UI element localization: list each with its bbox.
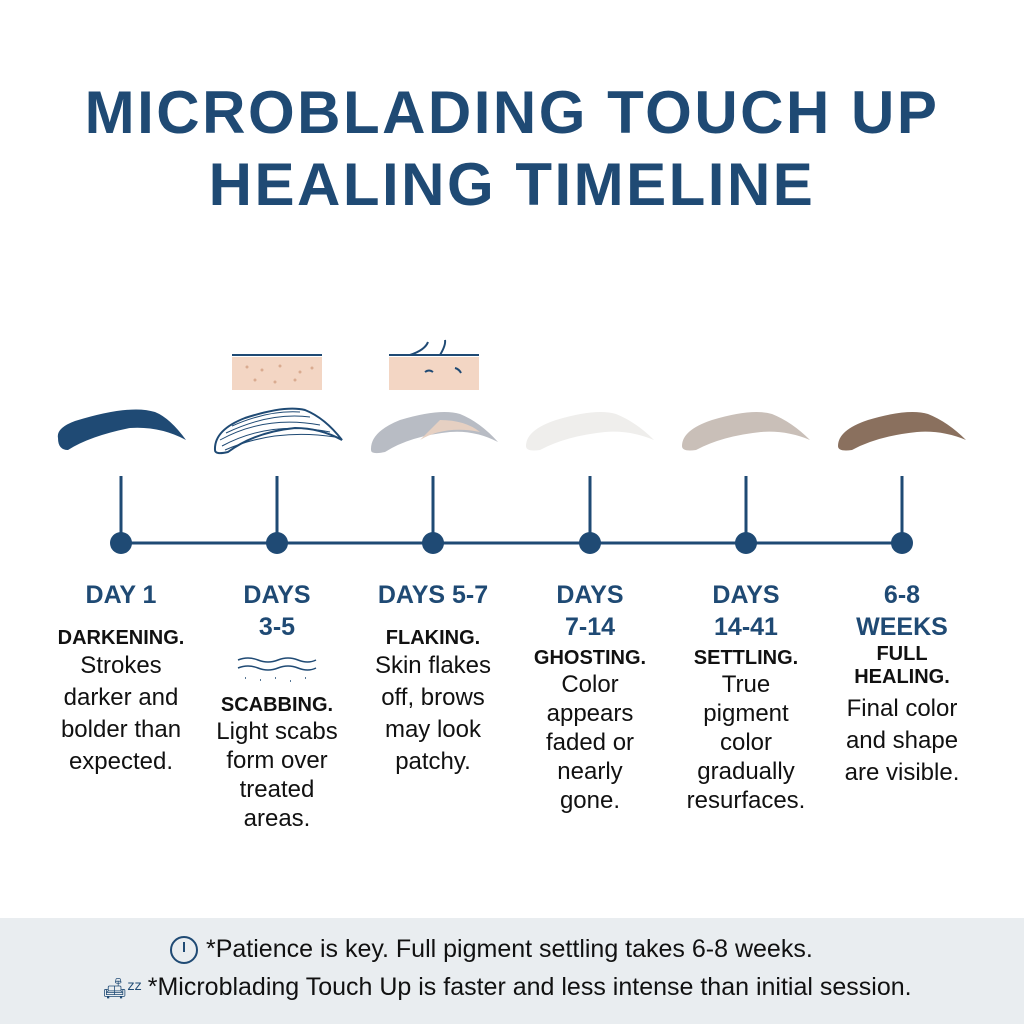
- column: 6-8 weeks: HEALING.: [854, 666, 950, 688]
- column: days 14-41: [687, 581, 805, 814]
- column: day 1: expected.: [69, 748, 173, 775]
- column: days 5-7: Skin flakes: [375, 652, 491, 679]
- column: 6-8 weeks: 6-8: [884, 581, 920, 609]
- icon: healed brow: [838, 412, 966, 450]
- column: days 5-7: FLAKING.: [386, 627, 480, 649]
- title: HEALING TIMELINE: [209, 151, 815, 218]
- column: days 3-5: areas.: [244, 805, 310, 832]
- column: 6-8 weeks: are visible.: [845, 759, 959, 786]
- footer panel: [0, 918, 1024, 1024]
- column: days 3-5: treated: [240, 776, 314, 803]
- icon: skin patch flaking: [389, 340, 479, 390]
- icon: ghost brow: [526, 412, 654, 450]
- title: MICROBLADING TOUCH UP: [85, 79, 939, 146]
- column: day 1: bolder than: [61, 716, 181, 743]
- column: days 3-5: form over: [226, 747, 328, 774]
- footer note 1: *Patience is key. Full pigment settling takes 6-8 weeks.: [206, 935, 813, 963]
- column: days 5-7: may look: [385, 716, 481, 743]
- column: 6-8 weeks: FULL: [876, 643, 928, 665]
- column: days 7-14: DAYS: [556, 581, 624, 609]
- column: days 14-41: color: [720, 729, 772, 756]
- column: day 1: Strokes: [80, 652, 162, 679]
- column: 6-8 weeks: WEEKS: [856, 613, 948, 641]
- icon: flaking brow: [371, 412, 498, 453]
- column: days 7-14: appears: [547, 700, 633, 727]
- column: days 14-41: gradually: [697, 758, 795, 785]
- footer note 2: 🛋ᶻᶻ*Microblading Touch Up is faster and less intense than initial session.: [102, 973, 912, 1001]
- icon: outlined brow: [215, 409, 342, 453]
- column: days 3-5: [216, 581, 338, 832]
- column: days 14-41: pigment: [703, 700, 789, 727]
- column: days 14-41: 14-41: [714, 613, 778, 641]
- column: days 14-41: resurfaces.: [687, 787, 805, 814]
- column: days 3-5: 3-5: [259, 613, 295, 641]
- icon: skin patch scabs: [232, 355, 322, 390]
- title: [85, 79, 939, 218]
- column: day 1: DAY 1: [86, 581, 156, 609]
- column: days 7-14: nearly: [557, 758, 623, 785]
- icon: dark brow: [58, 409, 186, 450]
- column: 6-8 weeks: [845, 581, 959, 786]
- column: 6-8 weeks: and shape: [846, 727, 958, 754]
- column: days 3-5: SCABBING.: [221, 694, 333, 716]
- column: days 14-41: DAYS: [712, 581, 780, 609]
- column: 6-8 weeks: Final color: [847, 695, 957, 722]
- column: days 3-5: DAYS: [243, 581, 311, 609]
- column: days 7-14: 7-14: [565, 613, 615, 641]
- column: days 5-7: [375, 581, 491, 775]
- icon: settling brow: [682, 412, 810, 450]
- column: days 5-7: DAYS 5-7: [378, 581, 488, 609]
- column: days 7-14: Color: [561, 671, 619, 698]
- column: days 3-5: Light scabs: [216, 718, 338, 745]
- column: days 5-7: off, brows: [381, 684, 485, 711]
- column: day 1: [58, 581, 184, 775]
- column: days 7-14: gone.: [560, 787, 620, 814]
- column: days 14-41: True: [722, 671, 770, 698]
- column: days 7-14: [534, 581, 646, 814]
- column: days 7-14: faded or: [546, 729, 634, 756]
- column: days 5-7: patchy.: [395, 748, 471, 775]
- column: day 1: darker and: [64, 684, 178, 711]
- column: day 1: DARKENING.: [58, 627, 184, 649]
- column: days 14-41: SETTLING.: [694, 647, 798, 669]
- column: days 7-14: GHOSTING.: [534, 647, 646, 669]
- icon: scab waves: [238, 658, 316, 681]
